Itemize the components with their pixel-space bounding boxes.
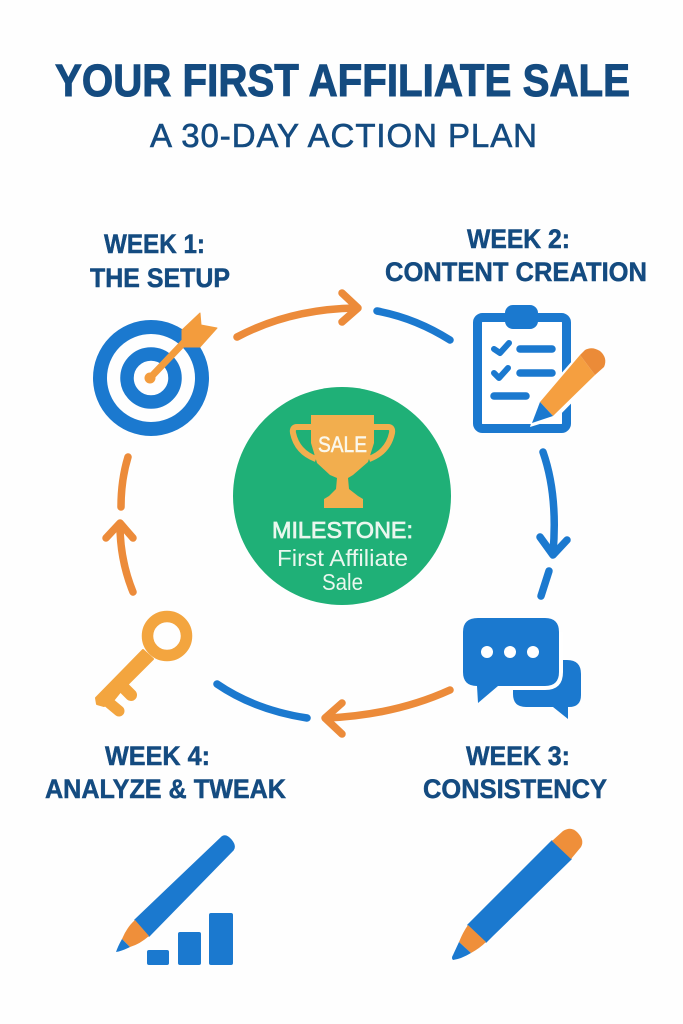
icon: trophy: SALE (318, 432, 367, 457)
heading: week 3: CONSISTENCY (423, 774, 607, 804)
subtitle: A 30-DAY ACTION PLAN (150, 117, 537, 154)
icon: trophy (293, 415, 392, 508)
arrow: week 4 to week 1 (106, 523, 133, 592)
milestone text (272, 517, 413, 595)
heading: week 4: ANALYZE & TWEAK (45, 774, 286, 804)
heading: week 1: WEEK 1: (104, 229, 205, 259)
heading: week 3: WEEK 3: (466, 741, 570, 771)
arrow: week 1 to week 2 (237, 293, 358, 337)
milestone text: First Affiliate (277, 545, 408, 571)
icon: chat bubbles (463, 618, 581, 719)
arc: into week 2 (377, 311, 450, 340)
arrow: week 2 to week 3 (540, 452, 567, 555)
center milestone badge (233, 387, 451, 605)
heading: week 2: CONTENT CREATION (385, 257, 647, 287)
arc: into week 3 (541, 571, 549, 596)
title: YOUR FIRST AFFILIATE SALE (55, 55, 630, 106)
milestone text: MILESTONE: (272, 517, 413, 543)
arrow: week 3 to week 4 (325, 690, 450, 734)
heading: week 2: WEEK 2: (467, 224, 570, 254)
arc: into week 4 (217, 684, 307, 718)
icon: pencil (452, 829, 582, 960)
arc: into week 1 (121, 457, 128, 507)
heading: week 3 (423, 741, 607, 804)
icon: target with arrow (100, 313, 217, 429)
icon: pencil with bar chart (116, 836, 234, 965)
icon: key (96, 616, 186, 711)
heading: week 1: THE SETUP (90, 263, 230, 293)
milestone text: Sale (322, 569, 363, 595)
heading: week 2 (385, 224, 647, 287)
pencil on clipboard (530, 348, 605, 427)
heading: week 4: WEEK 4: (105, 741, 210, 771)
heading: week 4 (45, 741, 286, 804)
heading: week 1 (90, 229, 230, 293)
icon: clipboard with pencil (478, 305, 605, 428)
